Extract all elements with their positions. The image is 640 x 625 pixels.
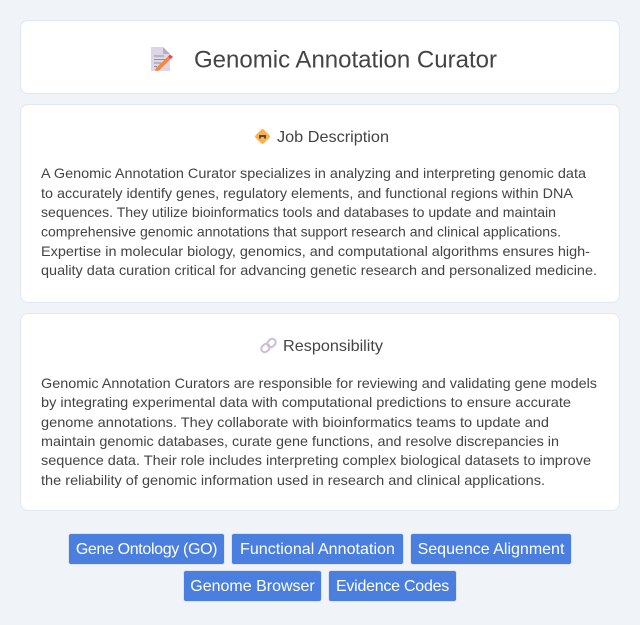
tag: gene ontology xyxy=(69,534,224,564)
tag: functional annotation: Functional Annotation xyxy=(240,541,395,558)
text block: job description: comprehensive genomic annotations that support research and clinical applications. xyxy=(41,224,561,240)
text block: responsibility: by integrating experimental data with computational predictions to ensure accurate xyxy=(41,394,571,410)
text block: responsibility: the reliability of genomic information used in research and clinical applications. xyxy=(41,472,545,488)
text block: job description: to accurately identify genes, regulatory elements, and functional regions within DNA xyxy=(41,185,574,201)
icon: document with pencil xyxy=(151,47,173,71)
heading: job description: Job Description xyxy=(277,129,389,146)
panel: header xyxy=(20,20,620,94)
text block: responsibility xyxy=(41,375,597,488)
text block: job description: sequences. They utilize bioinformatics tools and databases to update and maintain xyxy=(41,204,556,220)
icon: job diamond xyxy=(255,129,270,144)
text block: responsibility: maintain genomic databases, curate gene functions, and resolve discrepancies in xyxy=(41,433,559,449)
text block: job description: A Genomic Annotation Curator specializes in analyzing and interpreting genomic data xyxy=(41,165,586,181)
text block: responsibility: genome annotations. They collaborate with bioinformatics teams to update and xyxy=(41,414,549,430)
tag: gene ontology: Gene Ontology (GO) xyxy=(76,541,217,558)
tag: evidence codes xyxy=(329,571,456,601)
tag: genome browser: Genome Browser xyxy=(190,578,315,595)
text block: job description: Expertise in molecular biology, genomics, and computational algorithms ensures high- xyxy=(41,243,590,259)
icon: chain link xyxy=(260,338,277,354)
tag: functional annotation xyxy=(232,534,403,564)
tag: genome browser xyxy=(184,571,321,601)
tag: sequence alignment xyxy=(411,534,571,564)
text block: responsibility: sequence data. Their role includes interpreting complex biological datasets to improve xyxy=(41,452,591,468)
text block: job description xyxy=(41,165,597,278)
tag: sequence alignment: Sequence Alignment xyxy=(418,541,564,558)
title: Genomic Annotation Curator xyxy=(194,46,497,74)
panel: job description xyxy=(20,104,620,303)
tag: evidence codes: Evidence Codes xyxy=(336,578,449,595)
heading: responsibility: Responsibility xyxy=(283,338,383,355)
panel: responsibility xyxy=(20,313,620,511)
text block: responsibility: Genomic Annotation Curators are responsible for reviewing and validating gene models xyxy=(41,375,597,391)
text block: job description: quality data curation critical for advancing genetic research and personalized medicine. xyxy=(41,262,597,278)
